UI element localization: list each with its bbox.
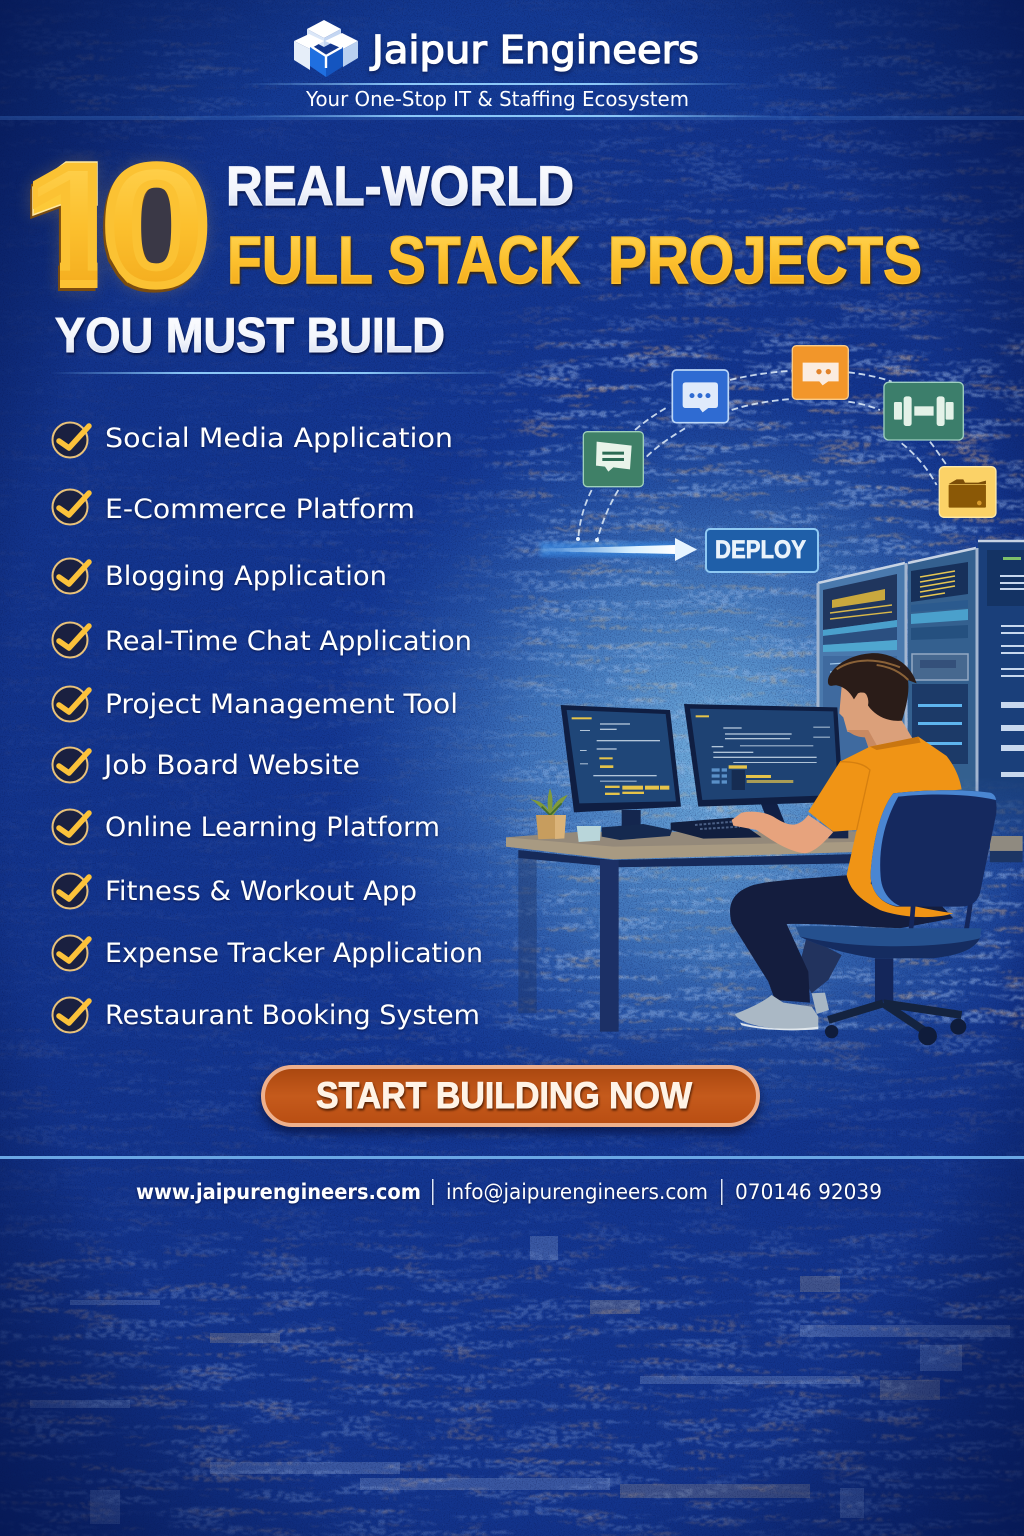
footer divider xyxy=(0,1156,1024,1159)
title: you must build: YOU MUST BUILD xyxy=(55,309,445,363)
person: shoes xyxy=(735,993,829,1030)
deploy badge xyxy=(706,529,818,572)
title: full stack projects: FULL STACK xyxy=(227,223,580,298)
icon: green message xyxy=(583,432,643,487)
footer contact: 070146 92039 xyxy=(735,1180,882,1204)
title: 10 xyxy=(24,154,214,299)
title: full stack projects xyxy=(227,223,922,298)
item 6: Job Board Website xyxy=(102,750,360,781)
dashed connection arcs xyxy=(578,371,947,540)
monitor left xyxy=(561,705,681,840)
footer contact: info@jaipurengineers.com xyxy=(446,1180,708,1204)
person: head xyxy=(828,653,917,750)
button: start building now: START BUILDING NOW xyxy=(316,1075,692,1116)
desk xyxy=(506,831,1023,1032)
footer contact xyxy=(136,1179,882,1205)
server racks xyxy=(818,540,1024,860)
illustration: developer at desk xyxy=(506,653,1023,1045)
icon: logo cubes xyxy=(294,20,358,77)
chair xyxy=(796,790,997,1045)
item 5: Project Management Tool xyxy=(105,689,458,720)
arrow: deploy xyxy=(530,537,697,561)
cup xyxy=(577,826,601,842)
monitor right xyxy=(684,704,843,823)
item 4: Real-Time Chat Application xyxy=(105,626,472,657)
project list xyxy=(52,422,483,1032)
title: 10: 0 xyxy=(102,130,211,320)
footer contact: www.jaipurengineers.com xyxy=(136,1180,421,1204)
icon: blue chat xyxy=(672,370,728,423)
header divider xyxy=(245,83,750,85)
title: 10: 1 xyxy=(20,130,129,320)
title: real-world: REAL-WORLD xyxy=(226,154,574,217)
button: start building now xyxy=(263,1067,758,1125)
plant xyxy=(530,788,568,839)
header band divider xyxy=(0,115,1024,120)
item 1: Social Media Application xyxy=(105,423,453,454)
item 7: Online Learning Platform xyxy=(105,812,440,843)
item 10: Restaurant Booking System xyxy=(105,1000,480,1031)
title divider xyxy=(50,372,502,374)
person: arm xyxy=(732,812,833,853)
item 3: Blogging Application xyxy=(105,561,387,592)
icon: orange chat xyxy=(792,346,848,399)
tagline: Your One-Stop IT & Staffing Ecosystem xyxy=(305,87,689,111)
person: shirt xyxy=(808,737,962,917)
deploy badge: DEPLOY xyxy=(715,536,806,564)
icon: wallet xyxy=(939,467,996,517)
title: full stack projects: PROJECTS xyxy=(608,223,922,298)
keyboard xyxy=(671,818,848,839)
item 8: Fitness & Workout App xyxy=(105,876,417,907)
item 9: Expense Tracker Application xyxy=(105,938,483,969)
person: trousers xyxy=(730,875,953,1003)
item 2: E-Commerce Platform xyxy=(105,494,415,525)
icon: dumbbell xyxy=(884,382,963,440)
heading: company name: Jaipur Engineers xyxy=(370,28,699,72)
